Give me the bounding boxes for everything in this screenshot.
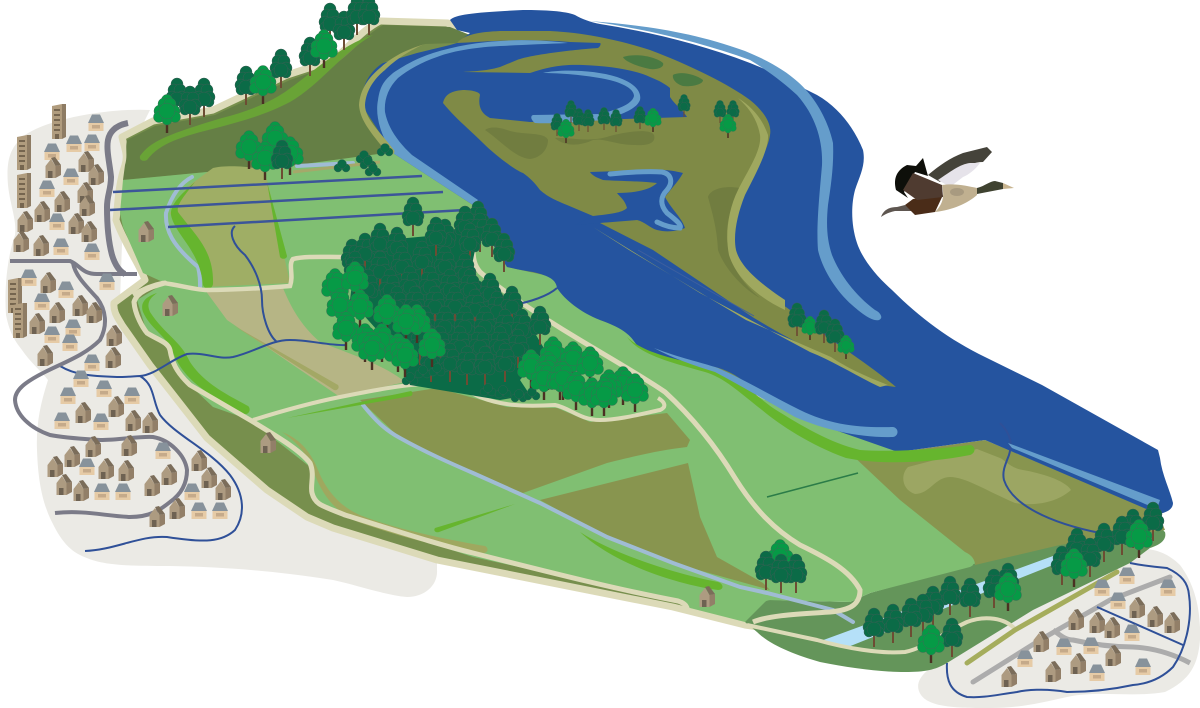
hedge on hill	[140, 35, 373, 161]
field: olive east	[850, 440, 1165, 565]
bottom right settlement roads	[947, 563, 1190, 697]
north east channel	[590, 21, 881, 320]
beak	[1003, 183, 1014, 189]
trees on hill	[154, 0, 380, 133]
winding road	[15, 263, 187, 517]
field: olive north	[360, 388, 690, 493]
field: sand	[205, 288, 405, 397]
island body	[443, 31, 896, 387]
field: olive south	[540, 463, 770, 590]
near wing brown	[903, 173, 943, 200]
tan hill path	[293, 162, 380, 172]
meadow streams	[166, 163, 853, 622]
meadow backing towards east bank	[745, 398, 1165, 622]
wing underside	[938, 163, 980, 187]
houses: meadow farms	[138, 221, 715, 607]
channel drainage stream	[60, 226, 1100, 551]
spit fine line	[638, 250, 754, 316]
main road east	[473, 247, 860, 622]
lower right green bank	[745, 520, 1165, 672]
left settlement ground	[5, 110, 437, 597]
far wing	[928, 147, 992, 182]
inner embankment road	[134, 283, 687, 608]
gray road main	[973, 577, 1170, 682]
island pale bank	[727, 98, 785, 310]
tan strip south west	[282, 432, 488, 553]
field drains	[110, 176, 465, 227]
tree row to the east	[1051, 502, 1164, 587]
settlement stream	[947, 563, 1190, 697]
hedge along stream	[580, 532, 722, 590]
river island	[443, 31, 896, 387]
dark furrow line	[767, 473, 858, 497]
spit trees	[788, 303, 854, 359]
island inlet	[575, 170, 685, 231]
near wing black	[895, 158, 928, 198]
left settlement roads	[10, 123, 187, 517]
breast shading	[950, 188, 964, 196]
island green patches	[623, 55, 663, 69]
inlet light water	[610, 172, 680, 228]
olive path	[967, 572, 1117, 663]
road south east	[747, 618, 1015, 652]
road below forest	[253, 384, 664, 420]
main light green meadow	[120, 152, 973, 622]
breast	[935, 184, 977, 212]
field: pale olive	[170, 166, 290, 287]
hedge along riverbank	[627, 337, 974, 462]
rear body	[905, 195, 943, 215]
tail	[881, 205, 912, 217]
tree group near road bend	[755, 540, 807, 593]
island pale spit	[593, 227, 888, 387]
gray road side	[1053, 630, 1190, 663]
neck and head	[977, 181, 1003, 194]
hedge centre	[287, 391, 412, 418]
main road	[107, 123, 128, 274]
road north west	[133, 257, 343, 295]
central forest	[322, 197, 648, 416]
lagoon light water	[531, 71, 640, 123]
east channel	[1008, 443, 1160, 509]
settlement stream branch	[1097, 607, 1183, 645]
south bank channel	[654, 348, 898, 437]
hedge upper middle	[267, 182, 287, 259]
bright trees west of forest	[322, 268, 348, 307]
hedge south	[434, 504, 515, 532]
green hedge strips	[140, 35, 722, 590]
tan strips	[233, 325, 488, 553]
goose in flight	[881, 147, 1014, 217]
houses: south east settlement	[1002, 568, 1180, 687]
cross road	[10, 261, 137, 274]
pale patch in east field	[903, 449, 1071, 504]
lower right settlement ground	[918, 549, 1200, 708]
bright trees east of forest	[540, 336, 566, 375]
hedge upper left	[171, 182, 213, 289]
island trees	[551, 94, 739, 143]
land base with outer embankment	[114, 21, 765, 628]
hill bank strip	[359, 44, 425, 155]
riverside tree row	[863, 563, 1022, 663]
island dark patches	[485, 127, 548, 159]
river	[362, 10, 1173, 514]
light water channel	[818, 556, 1053, 647]
tan strip in sand field	[233, 325, 339, 390]
light water channels	[359, 21, 1160, 509]
houses: west settlement	[8, 104, 231, 527]
north west channel	[377, 40, 568, 205]
tree clump at hill foot	[236, 122, 393, 180]
hill	[123, 25, 470, 180]
hedge west meadow	[142, 293, 250, 414]
